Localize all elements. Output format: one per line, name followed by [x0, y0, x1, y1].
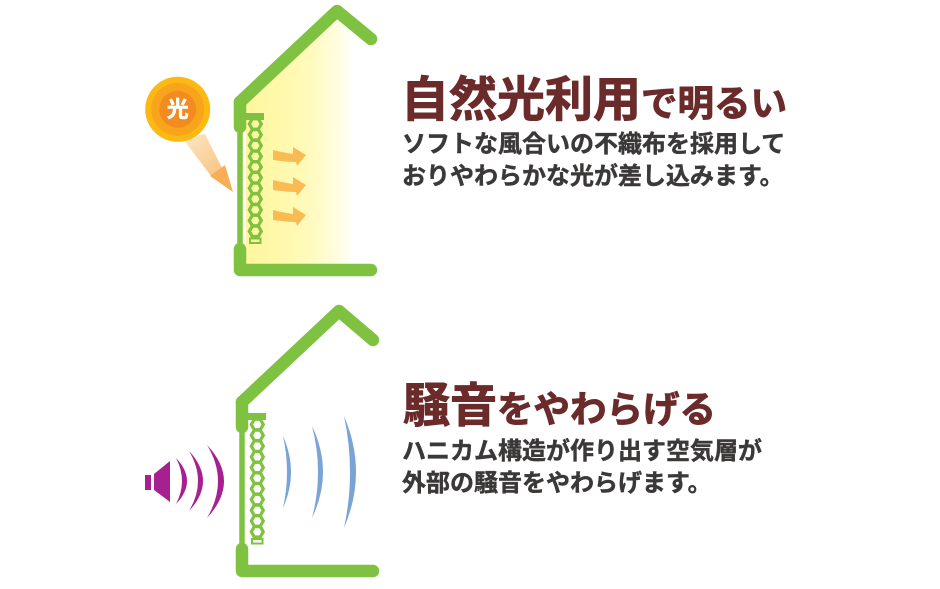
house outline	[240, 11, 371, 270]
icon: sun with light beam	[145, 77, 233, 192]
icon: speaker with sound waves	[145, 445, 224, 518]
text block: natural light: ソフトな風合いの不織布を採用して	[402, 131, 785, 158]
panel: noise reduction	[145, 311, 373, 571]
house outline	[242, 311, 373, 571]
panel: natural light	[145, 11, 371, 270]
heading: noise reduction: 騒音をやわらげる	[403, 379, 716, 432]
honeycomb curtain	[245, 113, 264, 243]
muted sound waves	[283, 416, 356, 528]
text block: noise reduction: ハニカム構造が作り出す空気層が	[402, 437, 762, 465]
light arrows	[273, 147, 306, 226]
text block: natural light: おりやわらかな光が差し込みます。	[402, 162, 784, 190]
honeycomb curtain	[247, 413, 266, 544]
text block: noise reduction: 外部の騒音をやわらげます。	[402, 470, 712, 497]
heading: natural light: 自然光利用で明るい	[401, 74, 787, 127]
icon: sun with light beam: 光	[167, 97, 189, 122]
yellow interior light	[246, 20, 354, 264]
